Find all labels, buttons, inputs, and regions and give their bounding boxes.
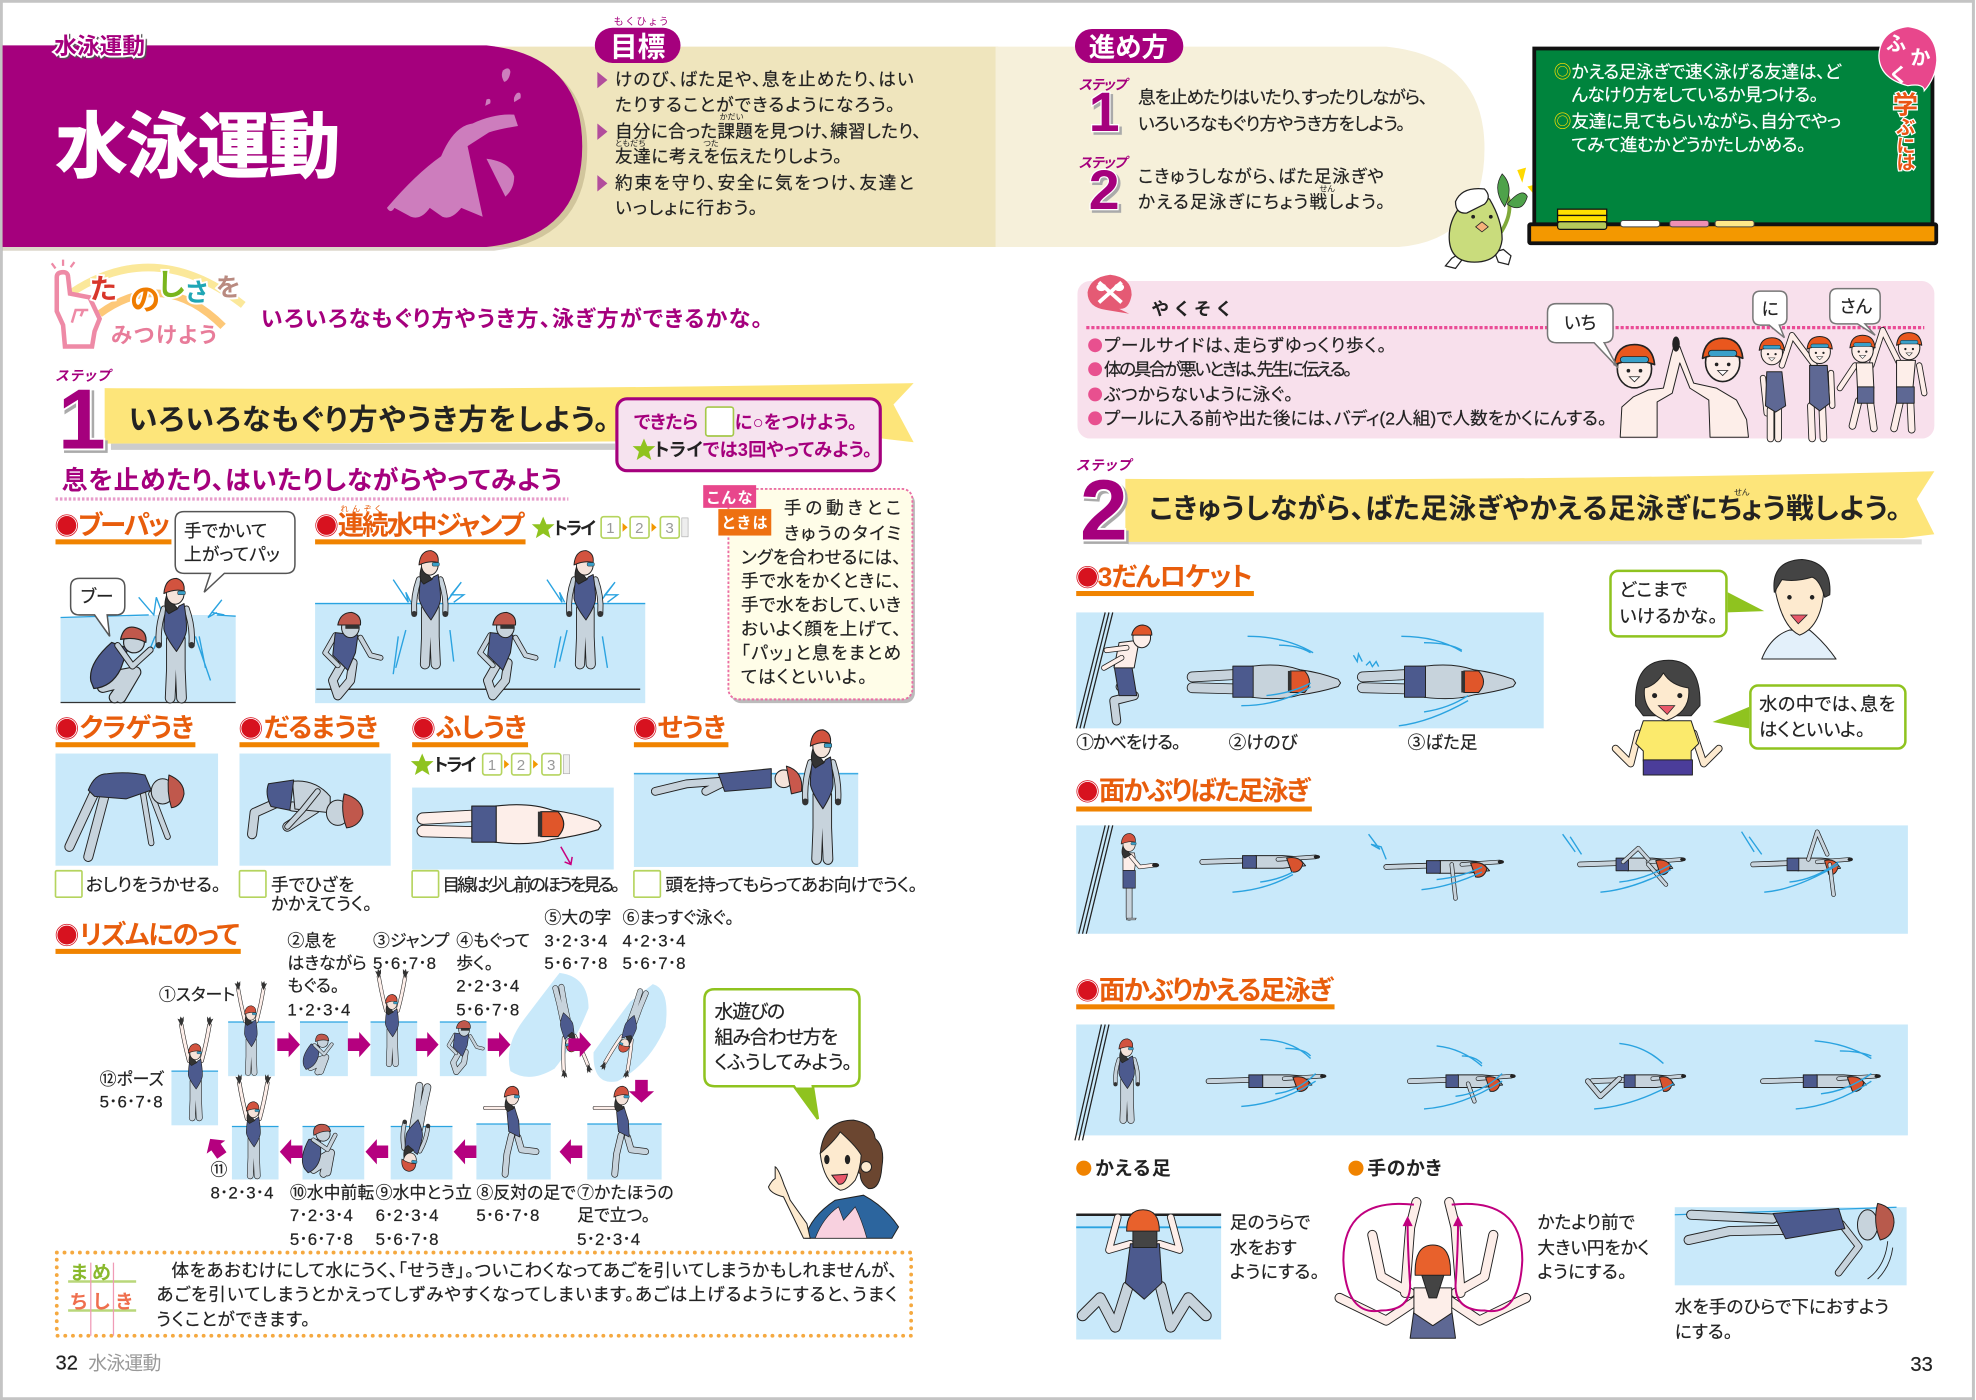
promise title: やくそく	[1151, 299, 1230, 319]
step 2 summary: ステップ	[1079, 155, 1130, 171]
children high five	[1614, 330, 1924, 439]
tip text: てはくといいよ。	[741, 667, 867, 687]
speech: いけるかな。	[1619, 606, 1718, 627]
speech: kaite	[175, 512, 295, 592]
check: gaze: 目線は少し前のほうを見る。	[442, 875, 620, 895]
labels: 歩く。	[456, 954, 493, 973]
panel: daruma float	[239, 754, 391, 866]
fukaku manabu badge: ふ	[1886, 33, 1906, 55]
text: pushing water	[1675, 1297, 1889, 1342]
steps pill: 進め方	[1089, 33, 1168, 63]
steps pill	[1075, 29, 1183, 63]
yellow ribbon	[105, 383, 914, 444]
step 2 summary: せん	[1319, 185, 1335, 194]
text: frog legs	[1230, 1213, 1319, 1282]
labels: 3･2･3･4	[544, 931, 607, 950]
labels: ⑧反対の足で	[476, 1183, 576, 1202]
board	[1534, 49, 1932, 227]
check: head: 頭を持ってもらってあお向けでうく。	[665, 875, 917, 895]
second note mark: ◎	[1554, 111, 1571, 131]
speech: kaite: 上がってパッ	[184, 545, 280, 565]
text: hand stroke	[1537, 1213, 1650, 1282]
rhythm sequence	[100, 909, 734, 1249]
speech: three	[1830, 289, 1880, 335]
heading: prone float	[412, 713, 528, 747]
panel: prone float	[412, 788, 614, 869]
promise list: ぶつからないように泳ぐ。	[1103, 385, 1293, 405]
first note mark: ◎	[1554, 62, 1571, 82]
check: knees: 手でひざを	[271, 874, 354, 895]
labels: ⑥まっすぐ泳ぐ。	[623, 909, 734, 928]
goals list: 自分に合った課題を見つけ、練習したり、	[615, 121, 921, 141]
step 2 summary: 2	[1089, 159, 1120, 221]
fun logo: hand and rainbow: し	[158, 269, 185, 302]
check instruction box: できたら	[634, 411, 698, 432]
labels: ①スタート	[159, 986, 235, 1005]
step 2 summary: こきゅうしながら、ばた足泳ぎや	[1138, 167, 1384, 187]
step 2 banner	[1076, 457, 1934, 558]
goals list: けのび、ばた足や、息を止めたり、はい	[615, 70, 914, 90]
panel: three stage rocket	[1076, 612, 1544, 728]
labels: 1･2･3･4	[287, 1001, 350, 1020]
text: hand stroke: かたより前で	[1537, 1213, 1635, 1233]
speech: teacher advice: くふうしてみよう。	[715, 1053, 852, 1074]
fukaku manabu badge: ぶ	[1896, 118, 1915, 139]
boy pair	[1840, 330, 1924, 393]
panel: back float	[634, 730, 858, 867]
speech: 水の中では、息を	[1759, 694, 1895, 715]
figure: woman teacher	[769, 1120, 899, 1238]
text: frog legs: ようにする。	[1230, 1262, 1319, 1282]
tip tags	[703, 485, 771, 536]
text: frog legs: 足のうらで	[1230, 1213, 1310, 1233]
water lines	[171, 1022, 662, 1127]
fukaku manabu badge: か	[1910, 47, 1930, 69]
heading: jump: 連続水中ジャンプ	[338, 510, 525, 540]
banner text: いろいろなもぐり方やうき方をしよう。	[129, 405, 609, 437]
labels: 5･6･7･8	[456, 1001, 519, 1020]
labels: 5･6･7･8	[623, 954, 686, 973]
labels: 8･2･3･4	[211, 1183, 274, 1202]
labels: ⑦かたほうの	[577, 1183, 674, 1202]
try marks: jump: トライ	[553, 518, 596, 538]
step 1 summary: 息を止めたりはいたり、すったりしながら、	[1138, 87, 1428, 107]
first note line two: んなけり方をしているか見つける。	[1571, 85, 1818, 105]
cap	[1415, 1245, 1451, 1275]
labels: はきながら	[287, 954, 367, 973]
header band	[3, 16, 1484, 251]
step 1 summary: いろいろなもぐり方やうき方をしよう。	[1138, 114, 1405, 134]
panel: frog legs illustration	[1076, 1210, 1221, 1340]
tip tags: こんな	[707, 490, 753, 507]
icon: ribbon	[1088, 275, 1132, 314]
body	[1410, 1311, 1456, 1338]
footer right: 33	[1910, 1354, 1933, 1376]
panel: pushing water	[1675, 1203, 1907, 1285]
fukaku manabu badge: く	[1890, 65, 1905, 87]
matome tag: ま	[71, 1263, 88, 1284]
matome tag	[68, 1263, 136, 1336]
mascot: bean sprout character	[1445, 168, 1537, 268]
girl	[1616, 660, 1719, 775]
panel: continuous jump	[315, 551, 645, 703]
goals list: つた	[703, 139, 719, 148]
labels: 足で立つ。	[577, 1206, 650, 1225]
fukaku manabu badge: 学	[1893, 91, 1918, 119]
text: hand stroke: ようにする。	[1537, 1262, 1627, 1282]
labels: 5･6･7･8	[544, 954, 607, 973]
heading: frog kick: 面かぶりかえる足泳ぎ	[1099, 975, 1335, 1005]
matome text: 体をあおむけにして水にうく、「せうき」。ついこわくなってあごを引いてしまうかもしれませんが、	[171, 1261, 897, 1281]
heading: back float	[634, 713, 728, 747]
tip text: きゅうのタイミ	[784, 523, 901, 543]
step 1 summary: 1	[1089, 81, 1120, 143]
speech	[1611, 571, 1764, 636]
labels: ③ジャンプ	[373, 931, 450, 950]
try marks: jump	[532, 517, 688, 538]
goal background	[3, 47, 998, 247]
heading: flutter kick: 面かぶりばた足泳ぎ	[1099, 776, 1312, 806]
heading: boo pa	[56, 510, 171, 544]
labels: ④もぐって	[456, 931, 530, 950]
promise list: プールに入る前や出た後には、バディ(2人組)で人数をかくにんする。	[1104, 409, 1607, 429]
speech	[1713, 686, 1905, 749]
hand stroke diagram	[1340, 1202, 1526, 1338]
panel: jellyfish float	[56, 754, 218, 866]
fun logo: hand and rainbow: の	[130, 284, 160, 317]
promise list: 体の具合が悪いときは、先生に伝える。	[1104, 360, 1352, 380]
tip text	[741, 498, 901, 687]
labels: ②息を	[287, 931, 337, 950]
tip tags: ときは	[722, 515, 768, 532]
fukaku manabu badge: は	[1897, 153, 1916, 174]
matome box	[57, 1253, 911, 1336]
figure: boy with speech	[1611, 559, 1836, 659]
second note: 友達に見てもらいながら、自分でやっ	[1571, 111, 1841, 131]
labels: ⑩水中前転	[290, 1183, 374, 1202]
labels: もぐる。	[287, 977, 339, 996]
labels: ⑫ポーズ	[100, 1070, 165, 1089]
matome tag: し	[93, 1292, 110, 1313]
goals list: かだい	[719, 113, 744, 122]
step small label: ステップ	[1076, 457, 1134, 473]
ruby: せん	[1734, 488, 1750, 497]
hand stroke title: 手のかき	[1367, 1157, 1442, 1179]
panel: flutter kick	[1076, 825, 1908, 934]
fukaku manabu badge	[1879, 26, 1937, 174]
arrows	[201, 1032, 654, 1164]
goals list: ともだち	[615, 139, 645, 148]
labels: three stage rocket: ①かべをける。	[1076, 733, 1181, 753]
heading: prone float: ふしうき	[435, 713, 527, 743]
step 1 banner	[56, 368, 914, 468]
fun logo: hand and rainbow: た	[90, 274, 117, 305]
footer left	[56, 1353, 161, 1375]
check: hips	[56, 871, 221, 897]
labels: 5･6･7･8	[476, 1206, 539, 1225]
step small label: ステップ	[56, 368, 113, 384]
speech: どこまで	[1619, 579, 1687, 600]
chalkboard	[1529, 49, 1936, 243]
labels: 5･6･7･8	[373, 954, 436, 973]
tip text: 手の動きとこ	[784, 498, 901, 518]
speech: one: いち	[1564, 313, 1596, 333]
labels: ⑪	[211, 1161, 228, 1180]
fun logo: hand and rainbow: みつけよう	[111, 324, 217, 348]
glide swimmer	[1192, 665, 1341, 699]
text: pushing water: 水を手のひらで下におすよう	[1675, 1297, 1889, 1317]
speech: teacher advice: 組み合わせ方を	[715, 1026, 838, 1048]
big boys	[1620, 343, 1748, 437]
check: knees	[239, 871, 372, 914]
step 2 summary	[1079, 155, 1385, 221]
ribbon shadow	[111, 444, 615, 450]
check instruction box	[617, 399, 880, 471]
heading: daruma float: だるまうき	[263, 713, 378, 743]
goals list: たりすることができるようになろう。	[615, 95, 895, 115]
arms	[1340, 1202, 1526, 1321]
heading: jellyfish float: クラゲうき	[79, 713, 194, 743]
banner text: こきゅうしながら、ばた足泳ぎやかえる足泳ぎにちょう戦しよう。	[1149, 493, 1900, 524]
speech: teacher advice: 水遊びの	[715, 1001, 785, 1023]
panel: frog kick	[1075, 1024, 1908, 1140]
tip text: ングを合わせるには、	[741, 547, 901, 567]
step number: 2	[1080, 462, 1128, 558]
tip text: 「パッ」と息をまとめ	[741, 643, 901, 663]
labels: 7･2･3･4	[290, 1206, 353, 1225]
fun lead text: いろいろなもぐり方やうき方、泳ぎ方ができるかな。	[261, 306, 762, 331]
goals pill: 目標	[610, 32, 666, 63]
heading: boo pa: ブーパッ	[78, 510, 170, 540]
fun logo: hand and rainbow: を	[216, 274, 240, 302]
goals list: 約束を守り、安全に気をつけ、友達と	[615, 173, 914, 193]
speech: two: に	[1762, 299, 1779, 319]
try marks: prone	[411, 754, 570, 775]
figures	[325, 612, 381, 696]
speech: three: さん	[1840, 297, 1872, 317]
speech: boo: ブー	[81, 585, 114, 606]
check: hips: おしりをうかせる。	[86, 875, 221, 895]
goals pill: もくひょう	[614, 16, 668, 28]
heading: jump	[315, 505, 526, 544]
try marks: prone: トライ	[434, 755, 476, 775]
tip text: 手で水をかくときに、	[741, 571, 901, 591]
labels: three stage rocket	[1076, 733, 1477, 753]
goals pill	[595, 16, 681, 63]
check: head	[634, 871, 917, 897]
heading: three stage rocket: 3だんロケット	[1098, 562, 1253, 592]
matome tag: ち	[71, 1292, 87, 1313]
speech: はくといいよ。	[1759, 719, 1865, 740]
step 2 summary: かえる足泳ぎにちょう戦しよう。	[1138, 192, 1385, 212]
figure: crouching	[91, 627, 150, 697]
small category label: 水泳運動	[54, 33, 145, 59]
speech: teacher advice	[704, 989, 859, 1119]
speech: one	[1547, 304, 1618, 368]
matome text	[156, 1261, 897, 1330]
dotted line	[1086, 326, 1924, 329]
heading: back float: せうき	[657, 713, 726, 743]
magenta title panel shadow	[3, 49, 587, 251]
tip text: 手で水をおして、いき	[741, 595, 901, 615]
labels: 5･6･7･8	[376, 1230, 439, 1249]
labels: three stage rocket: ③ばた足	[1408, 733, 1477, 753]
text: pushing water: にする。	[1675, 1322, 1732, 1342]
check: knees: かかえてうく。	[271, 894, 372, 914]
fukaku manabu badge: に	[1897, 136, 1915, 157]
labels: 5･2･3･4	[577, 1230, 640, 1249]
wall	[1076, 612, 1113, 728]
tip box	[703, 485, 915, 703]
figures row one	[235, 969, 658, 1079]
footer left: 32	[56, 1353, 78, 1375]
icon: swimmer splash	[387, 68, 521, 218]
figure: girl with speech	[1616, 660, 1905, 775]
check instruction box: トライでは3回やってみよう。	[654, 439, 872, 460]
labels: 5･6･7･8	[100, 1093, 163, 1112]
chalk	[1621, 221, 1754, 227]
step number: 1	[58, 372, 106, 468]
goals list: いっしょに行おう。	[615, 198, 757, 218]
ribbon	[1128, 539, 1922, 544]
step 1 summary: ステップ	[1079, 76, 1130, 92]
steps background	[996, 47, 1484, 247]
heading: rhythm: リズムにのって	[79, 920, 239, 950]
circle paths	[1343, 1204, 1522, 1311]
figures row two	[177, 1016, 646, 1179]
labels: 5･6･7･8	[290, 1230, 353, 1249]
goals list: 友達に考えを伝えたりしよう。	[615, 147, 842, 167]
labels	[100, 909, 734, 1249]
promise panel	[1077, 275, 1934, 439]
fun logo: hand and rainbow	[52, 260, 243, 348]
check instruction box: に○をつけよう。	[735, 411, 857, 432]
title: 水泳運動	[56, 107, 340, 187]
matome tag: き	[116, 1291, 132, 1313]
figure: standing	[156, 578, 195, 698]
sub heading: 息を止めたり、はいたりしながらやってみよう	[62, 465, 562, 495]
tray	[1529, 224, 1936, 243]
labels: ⑨水中とう立	[376, 1183, 472, 1202]
speech: two	[1753, 291, 1787, 338]
promise list: プールサイドは、走らずゆっくり歩く。	[1104, 336, 1386, 356]
wall kicker	[1104, 625, 1152, 721]
matome text: うくことができます。	[156, 1310, 310, 1330]
panel: boo pa	[61, 512, 295, 703]
labels: three stage rocket: ②けのび	[1229, 733, 1299, 753]
fun logo: hand and rainbow: さ	[186, 279, 208, 307]
flutter swimmer	[1363, 665, 1516, 699]
footer left: 水泳運動	[88, 1353, 161, 1375]
speech: boo	[71, 578, 125, 636]
speech: kaite: 手でかいて	[184, 521, 267, 541]
check: gaze	[412, 871, 620, 897]
heading: jump: れんぞく	[340, 505, 381, 514]
promise list	[1088, 336, 1607, 429]
text: hand stroke: 大きい円をかく	[1537, 1238, 1650, 1258]
water tiles	[171, 973, 667, 1179]
goals list	[597, 70, 921, 218]
girl pair	[1763, 335, 1832, 413]
matome tag: め	[92, 1263, 111, 1284]
text: frog legs: 水をおす	[1230, 1238, 1297, 1258]
labels: 2･2･3･4	[456, 977, 519, 996]
frog leg title: かえる足	[1095, 1157, 1171, 1179]
labels: 6･2･3･4	[376, 1206, 439, 1225]
man	[1762, 559, 1836, 659]
tip text: おいよく顔を上げて、	[741, 619, 901, 639]
second note line two: てみて進むかどうかたしかめる。	[1571, 135, 1806, 155]
labels: ⑤大の字	[544, 909, 611, 928]
eraser	[1558, 209, 1607, 229]
magenta title panel	[3, 45, 582, 247]
first note: かえる足泳ぎで速く泳げる友達は、ど	[1571, 62, 1843, 82]
step 1 summary	[1079, 76, 1428, 143]
labels: 4･2･3･4	[623, 931, 686, 950]
matome text: あごを引いてしまうとかえってしずみやすくなってしまいます。あごは上げるようにすると、うまく	[156, 1284, 897, 1304]
